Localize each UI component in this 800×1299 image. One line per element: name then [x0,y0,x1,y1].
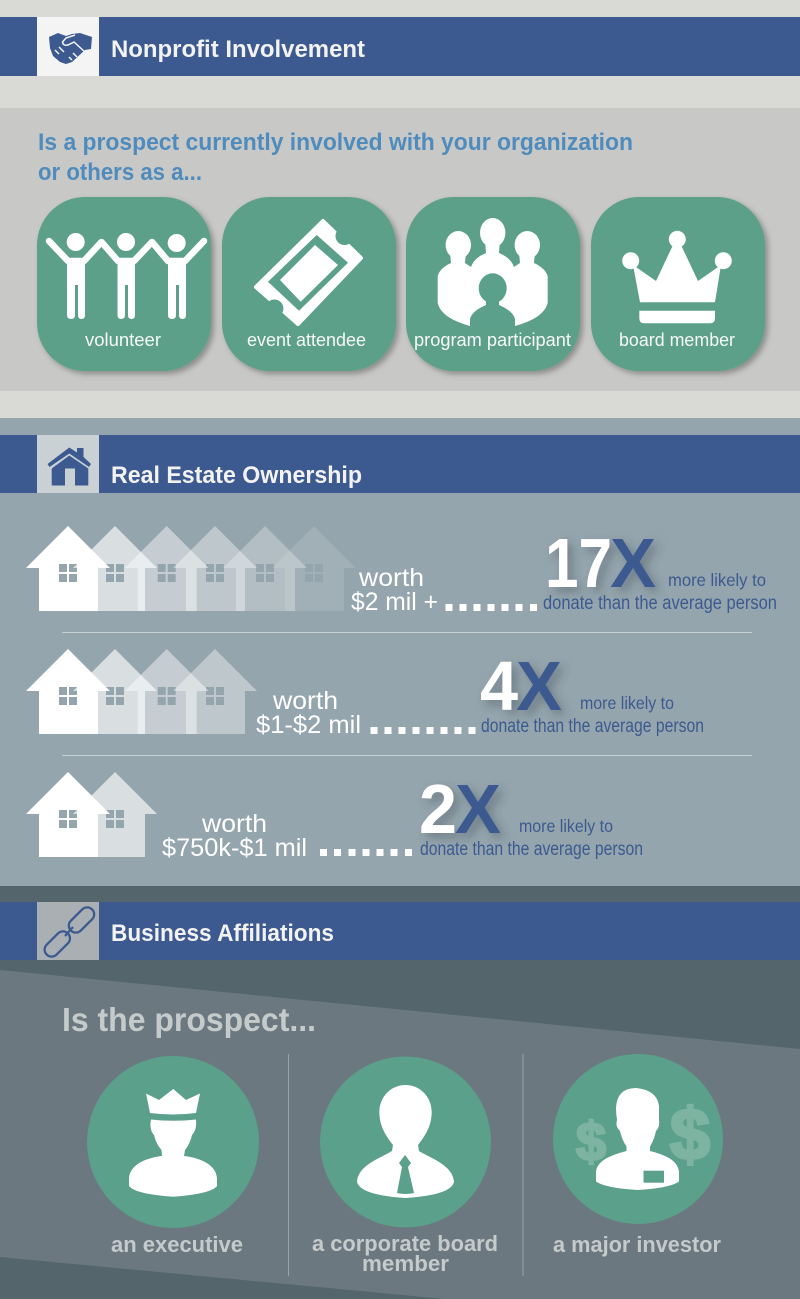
label: a corporate board [312,1231,498,1256]
icon: ticket [256,221,361,324]
row: $2 mil + [26,524,777,616]
business lighter polygon [0,970,800,1299]
icon: investor with dollar signs: $ [670,1095,710,1175]
card: volunteer [37,197,211,371]
stat text: donate than the average person [420,839,643,860]
header: Business Affiliations [0,902,800,960]
label: event attendee [247,330,366,350]
dotted leader [320,849,412,856]
section background: real estate [0,418,800,886]
label: an executive [111,1232,243,1257]
stat: 17X: 17 [545,524,612,602]
stat: 4X: 4 [480,647,518,725]
icon: house [48,448,91,486]
icon: person with tie [357,1085,454,1198]
icon: group of people [438,218,548,327]
stat: 4X: X [516,647,562,725]
stat text: more likely to [580,693,674,713]
label: a major investor [553,1232,721,1257]
panel: involvement [0,108,800,391]
stat text: donate than the average person [481,716,704,737]
dotted leader [370,727,476,734]
stat: 4X [480,647,562,725]
header: Real Estate Ownership [0,435,800,493]
stat: 2X: 2 [419,770,457,848]
stat text [420,816,643,860]
worth label: $1-$2 mil [256,711,361,739]
stat: 2X: X [455,770,501,848]
divider [522,1054,524,1276]
label: program participant [414,330,571,350]
stat: 17X: X [610,524,656,602]
header title: Real Estate Ownership [111,462,362,489]
label [312,1231,498,1276]
section background: top [0,0,800,418]
row: $1-$2 mil [26,647,704,739]
header title: Nonprofit Involvement [111,36,365,63]
worth label [162,810,307,862]
divider [62,632,752,633]
worth label: $2 mil + [351,588,438,616]
card: board member [591,197,765,371]
icon: person with crown [129,1089,217,1197]
stat text: more likely to [519,816,613,836]
worth label: $750k-$1 mil [162,834,307,862]
card: event attendee [222,197,396,371]
item: an executive [87,1056,259,1257]
houses [26,526,356,611]
icon: investor with dollar signs: $ [576,1112,606,1172]
question heading [38,129,633,186]
houses [26,772,157,857]
stat text [543,570,777,614]
question heading: or others as a... [38,159,202,186]
dotted leader [446,604,537,611]
worth label: worth [358,564,424,592]
worth label [256,687,361,739]
header title: Business Affiliations [111,920,334,947]
section background: business [0,886,800,1299]
divider [288,1054,289,1276]
worth label: worth [201,810,267,838]
worth label: worth [272,687,338,715]
icon: handshake [49,33,92,64]
label: volunteer [85,330,161,350]
stat text [481,693,704,737]
icon: crown [622,231,732,323]
label: board member [619,330,735,350]
stat: 17X [545,524,656,602]
row: $750k-$1 mil [26,770,643,862]
item: a corporate board member [312,1056,498,1276]
worth label [351,564,438,616]
icon: investor with dollar signs [576,1088,710,1190]
item: a major investor [553,1054,723,1257]
question heading: Is a prospect currently involved with your organization [38,129,633,156]
divider [62,755,752,756]
icon: chain link [42,904,97,960]
houses [26,649,257,734]
stat text: more likely to [668,570,766,590]
icon: three people [49,233,204,319]
heading: Is the prospect: Is the prospect... [62,1001,316,1038]
stat: 2X [419,770,501,848]
card: program participant [406,197,580,371]
header: Nonprofit Involvement [0,17,800,76]
label: member [362,1251,449,1276]
